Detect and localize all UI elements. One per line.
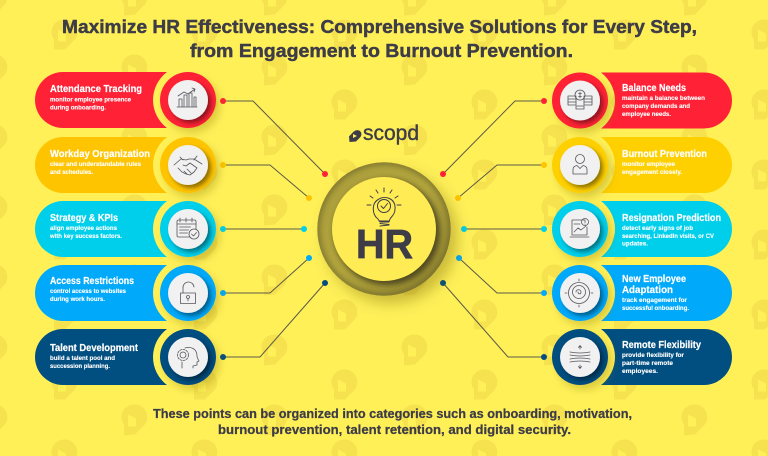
panel: Strategy & KPIs: with key success factors. xyxy=(49,233,122,240)
panel: Workday Organization: Workday Organization xyxy=(50,149,150,160)
panel: Balance Needs: company demands and xyxy=(622,103,690,110)
panel: Attendance Tracking: Attendance Tracking xyxy=(50,84,142,95)
panel: Remote Flexibility: employees. xyxy=(622,368,658,375)
panel: Attendance Tracking: monitor employee presence xyxy=(50,96,131,104)
title: Maximize HR Effectiveness: Comprehensive Solutions for Every Step, xyxy=(62,16,697,37)
panel: Resignation Prediction xyxy=(552,201,732,257)
panel: Burnout Prevention: engagement closely. xyxy=(622,169,682,176)
panel: Burnout Prevention: Burnout Prevention xyxy=(622,149,707,160)
panel: Strategy & KPIs xyxy=(35,201,216,257)
panel: Talent Development: succession planning. xyxy=(50,363,110,370)
panel: Burnout Prevention xyxy=(552,137,732,193)
panel: Remote Flexibility xyxy=(552,329,732,385)
icon: handshake xyxy=(174,156,202,175)
icon: light bulb xyxy=(367,188,401,226)
panel: Talent Development: build a talent pool and xyxy=(50,355,115,362)
title: from Engagement to Burnout Prevention. xyxy=(190,40,573,61)
panel: New Employee Adaptation: Adaptation xyxy=(622,285,673,296)
panel: Workday Organization: and schedules. xyxy=(50,169,93,176)
icon: calendar with check xyxy=(177,218,199,239)
panel: Remote Flexibility: part-time remote xyxy=(622,360,673,367)
HR label: HR xyxy=(356,221,413,267)
panel: New Employee Adaptation: track engagement for xyxy=(622,297,687,304)
icon: flexible lines with arrows xyxy=(570,346,590,368)
panel: Workday Organization xyxy=(35,137,216,193)
logo: scopd: scopd xyxy=(363,122,419,145)
panel: Access Restrictions: control access to websites xyxy=(50,288,126,295)
footer note: These points can be organized into categories such as onboarding, motivation, xyxy=(153,407,632,421)
panel: Attendance Tracking xyxy=(35,72,216,128)
panel: Access Restrictions: during work hours. xyxy=(50,296,105,303)
title xyxy=(62,16,697,61)
panel: Strategy & KPIs: Strategy & KPIs xyxy=(50,213,118,224)
panel: Attendance Tracking: during onboarding. xyxy=(50,104,106,112)
panel: Resignation Prediction: Resignation Prediction xyxy=(622,213,721,224)
icon: open padlock xyxy=(180,282,196,304)
panel: Balance Needs: Balance Needs xyxy=(622,83,686,94)
panel: Talent Development xyxy=(35,329,216,385)
panel: Workday Organization: clear and understandable rules xyxy=(50,161,141,168)
panel: Resignation Prediction: detect early signs of job xyxy=(622,225,693,232)
panel: Remote Flexibility: provide flexibility for xyxy=(622,352,684,359)
icon: head in target xyxy=(565,279,593,307)
panel: Access Restrictions: Access Restrictions xyxy=(50,276,134,287)
panel: Strategy & KPIs: align employee actions xyxy=(50,225,117,232)
panel: Resignation Prediction: searching, LinkedIn visits, or CV xyxy=(622,233,715,240)
panel: Remote Flexibility: Remote Flexibility xyxy=(622,340,701,351)
panel: Balance Needs: employee needs. xyxy=(622,111,671,118)
icon: bar chart xyxy=(177,88,197,107)
icon: head with gear xyxy=(178,347,199,368)
icon: report with alert badge xyxy=(570,218,589,237)
panel: Burnout Prevention: monitor employee xyxy=(622,161,675,168)
panel: New Employee Adaptation: New Employee xyxy=(622,274,686,285)
footer note: burnout prevention, talent retention, and digital security. xyxy=(218,423,571,437)
icon: money stacks xyxy=(568,90,592,109)
panel: New Employee Adaptation: successful onboarding. xyxy=(622,305,689,312)
panel: Balance Needs xyxy=(552,72,732,128)
panel: Access Restrictions xyxy=(35,265,216,321)
connector lines and dots xyxy=(220,98,547,360)
panel: New Employee Adaptation xyxy=(552,265,732,321)
central HR dial xyxy=(317,162,451,296)
icon: person xyxy=(573,154,587,174)
panel: Balance Needs: maintain a balance between xyxy=(622,95,705,102)
footer note xyxy=(153,407,632,437)
panel: Resignation Prediction: updates. xyxy=(622,240,648,248)
panel: Talent Development: Talent Development xyxy=(50,343,139,354)
